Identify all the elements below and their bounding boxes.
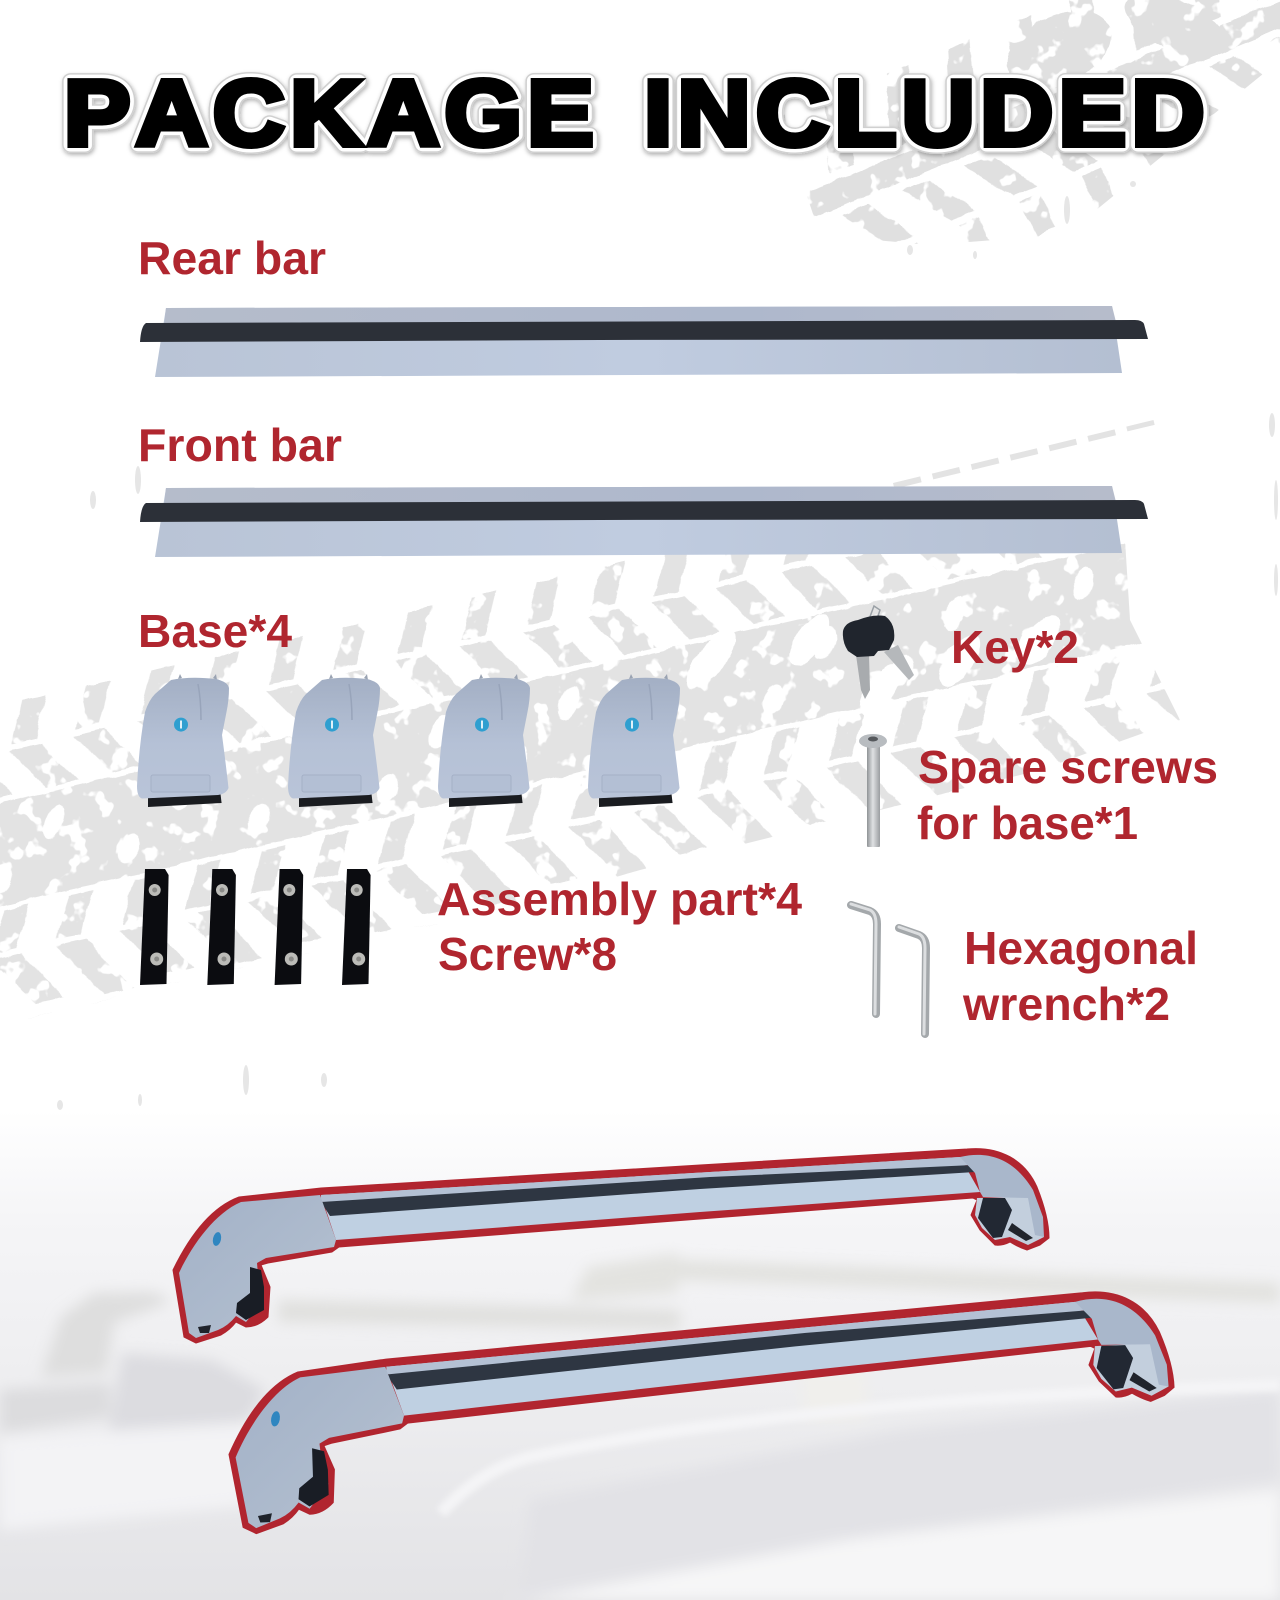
label: base: Base*4	[138, 605, 292, 657]
base 4	[588, 674, 680, 807]
label: assembly part and screw: Screw*8	[438, 928, 617, 980]
background: top right tire track	[784, 0, 1280, 244]
title: PACKAGE	[64, 61, 599, 165]
background: middle tire tracks	[0, 544, 1180, 1004]
label: front bar: Front bar	[138, 419, 342, 471]
assembly part 4	[342, 869, 371, 985]
assembly part 3	[275, 869, 303, 985]
assembly part 2	[207, 869, 236, 985]
label: assembly part and screw	[437, 873, 802, 980]
background: tread dashes	[893, 420, 1155, 489]
icon: hex wrenches	[851, 904, 926, 1034]
background: bottom car roof photo	[0, 1110, 1280, 1600]
icon: keys	[843, 606, 914, 699]
assembly part 1	[140, 869, 169, 985]
label: spare screws	[917, 741, 1218, 849]
title: INCLUDED	[644, 61, 1210, 165]
label: spare screws: Spare screws	[918, 741, 1218, 793]
title	[64, 61, 1210, 165]
icon: spare screw	[859, 734, 887, 847]
label: hexagonal wrench: Hexagonal	[964, 922, 1198, 974]
label: hexagonal wrench: wrench*2	[962, 978, 1170, 1030]
front bar	[140, 486, 1148, 557]
rear bar	[140, 306, 1148, 377]
base 3	[438, 674, 530, 807]
background: specks	[57, 181, 1278, 1110]
assembled roof rack: front	[225, 1289, 1178, 1534]
title: INCLUDED	[644, 61, 1210, 165]
title: PACKAGE	[64, 61, 599, 165]
label: assembly part and screw: Assembly part*4	[437, 873, 802, 925]
label: hexagonal wrench	[962, 922, 1198, 1030]
title: INCLUDED	[644, 61, 1210, 165]
assembled roof rack: rear	[173, 1149, 1049, 1343]
label: key: Key*2	[951, 621, 1079, 673]
label: spare screws: for base*1	[917, 797, 1138, 849]
label: rear bar: Rear bar	[138, 232, 326, 284]
base 2	[288, 674, 380, 807]
base 1	[137, 674, 229, 807]
title: PACKAGE	[64, 61, 599, 165]
